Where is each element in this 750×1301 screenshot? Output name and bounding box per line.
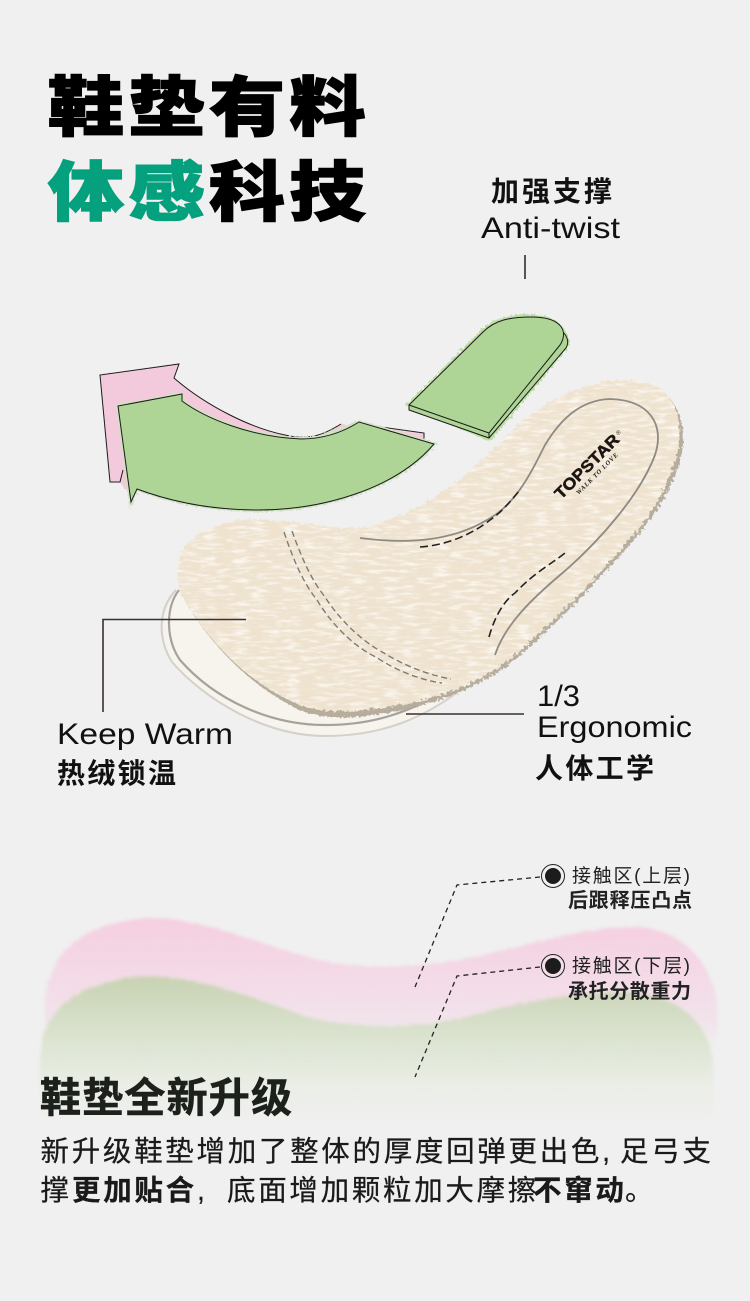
label: anti-twist <box>481 176 621 279</box>
body line 2: 。 <box>625 1175 654 1207</box>
body line 2: 更加贴合 <box>72 1175 197 1207</box>
title line 1: 鞋垫有料 <box>48 71 370 144</box>
insole stitching <box>284 399 658 683</box>
label: ergonomic: Ergonomic <box>537 711 692 744</box>
cross-section: pink upper layer <box>45 918 718 1080</box>
callout: upper contact zone: 后跟释压凸点 <box>568 889 692 912</box>
title <box>48 71 370 229</box>
exploded layer: pink arch piece <box>100 364 424 500</box>
body text <box>40 1136 714 1207</box>
body line 2: , <box>197 1175 205 1207</box>
label: ergonomic: 人体工学 <box>535 753 654 784</box>
body line 2: 不窜动 <box>533 1175 627 1207</box>
callout: upper contact zone <box>415 864 692 987</box>
label: ergonomic: 1/3 <box>537 680 580 713</box>
exploded layer: green arch piece <box>118 394 434 510</box>
body line 2: 撑 <box>40 1175 69 1207</box>
brand logo: TOPSTAR: ® <box>615 429 623 437</box>
callout: lower contact zone: 承托分散重力 <box>568 980 691 1003</box>
label: keep warm: 热绒锁温 <box>57 758 176 789</box>
brand logo: TOPSTAR: TOPSTAR <box>552 431 624 503</box>
body line 2: 底面增加颗粒加大摩擦 <box>227 1175 539 1207</box>
body line 1: 新升级鞋垫增加了整体的厚度回弹更出色, <box>40 1136 613 1168</box>
label: anti-twist: Anti-twist <box>481 212 621 245</box>
title line 2: 体感 <box>48 156 209 229</box>
label: anti-twist: 加强支撑 <box>491 176 612 207</box>
body line 1: 足弓支 <box>620 1136 714 1168</box>
section heading: 鞋垫全新升级 <box>40 1075 293 1121</box>
label: keep warm <box>57 620 246 789</box>
brand logo: TOPSTAR <box>552 426 633 508</box>
insole base layer <box>162 590 460 736</box>
label: ergonomic <box>406 680 692 784</box>
cross-section: green lower layer <box>39 976 714 1150</box>
title line 2 <box>48 156 370 229</box>
callout: lower contact zone: 接触区(下层) <box>572 955 690 977</box>
insole fur top <box>178 380 679 711</box>
brand logo: TOPSTAR: WALK TO LOVE <box>575 451 620 496</box>
callout: upper contact zone: 接触区(上层) <box>572 865 690 887</box>
insole fur shadow <box>180 383 683 717</box>
exploded layer: green heel piece <box>408 315 568 440</box>
title line 2: 科技 <box>209 156 370 229</box>
label: keep warm: Keep Warm <box>57 718 233 751</box>
callout: lower contact zone <box>415 954 691 1077</box>
